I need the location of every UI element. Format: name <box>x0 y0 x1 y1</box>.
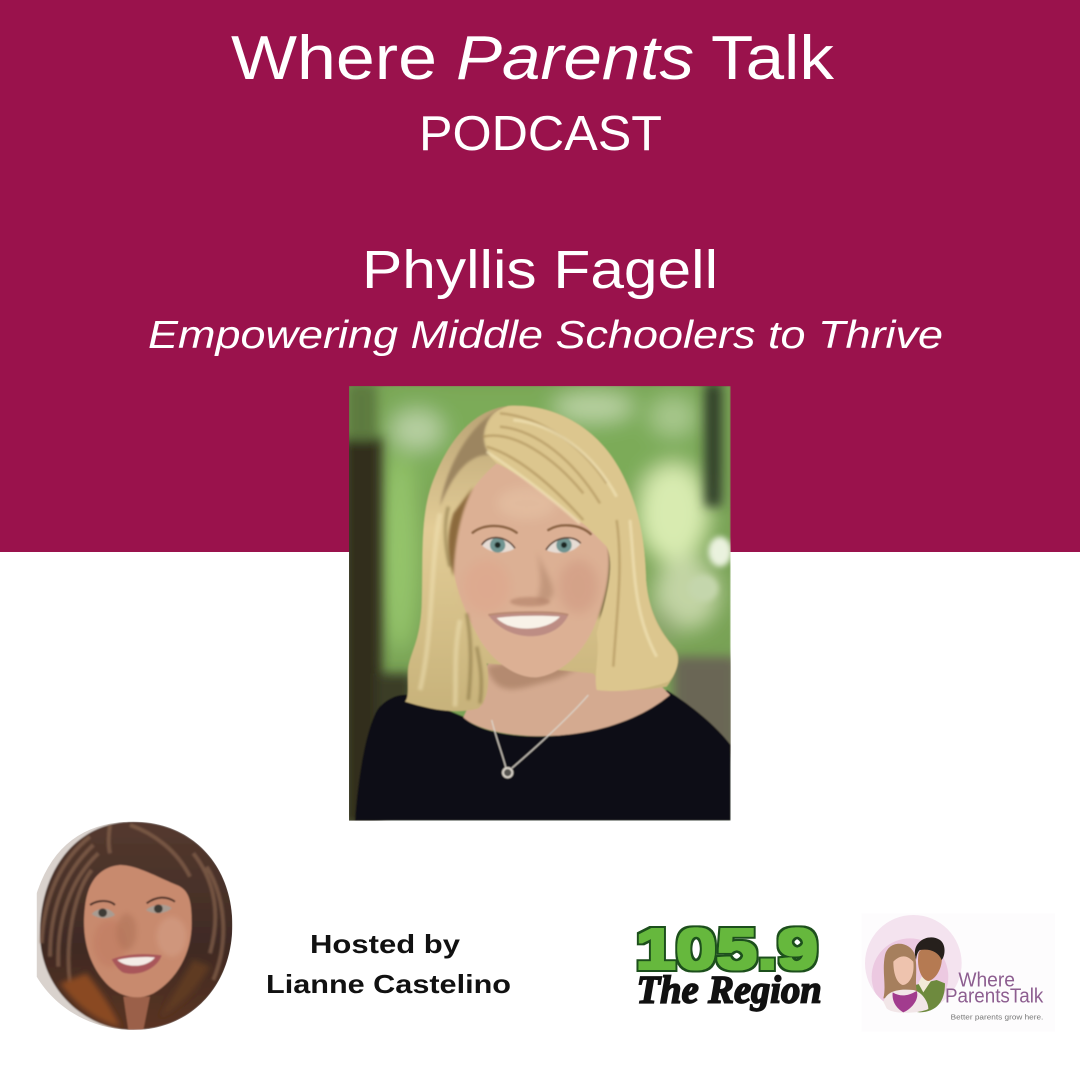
nose shading <box>537 562 554 600</box>
host eyes <box>90 898 175 918</box>
logo wordmark: Where <box>958 968 1015 991</box>
subtitle: podcast: PODCAST <box>419 107 662 161</box>
guest eyebrows <box>473 525 591 534</box>
logo man <box>913 937 945 1012</box>
guest hair back <box>405 406 678 711</box>
guest photo <box>343 383 737 827</box>
host smile <box>112 954 162 974</box>
title: Talk <box>711 24 835 93</box>
episode title: Empowering Middle Schoolers to Thrive <box>148 314 943 357</box>
necklace <box>492 695 588 777</box>
radio station logo <box>635 919 822 1011</box>
maroon header band <box>0 0 1080 552</box>
where parents talk logo <box>865 915 1044 1021</box>
title: Parents <box>456 24 694 93</box>
logo woman <box>883 944 928 1013</box>
host neck <box>123 997 150 1030</box>
host hair <box>40 822 233 1030</box>
guest face <box>452 463 609 677</box>
guest hair fringe <box>483 406 677 691</box>
logo script: The Region <box>637 967 822 1011</box>
logo wordmark <box>945 968 1044 1007</box>
guest eyes <box>482 537 581 553</box>
guest neck <box>462 663 672 738</box>
host portrait <box>33 820 237 1033</box>
host credit: Hosted by <box>310 929 461 959</box>
logo number: 105.9 <box>635 919 818 982</box>
title <box>231 24 835 93</box>
host face <box>84 865 192 997</box>
logo circle <box>865 915 962 1012</box>
logo wordmark: ParentsTalk <box>945 984 1044 1007</box>
host credit: Lianne Castelino <box>266 969 511 999</box>
guest top <box>355 690 731 821</box>
host credit <box>266 929 511 999</box>
logo tagline: Better parents grow here. <box>951 1015 1043 1022</box>
guest name: Phyllis Fagell <box>362 240 718 300</box>
guest smile <box>488 612 568 636</box>
title: Where <box>231 24 437 93</box>
